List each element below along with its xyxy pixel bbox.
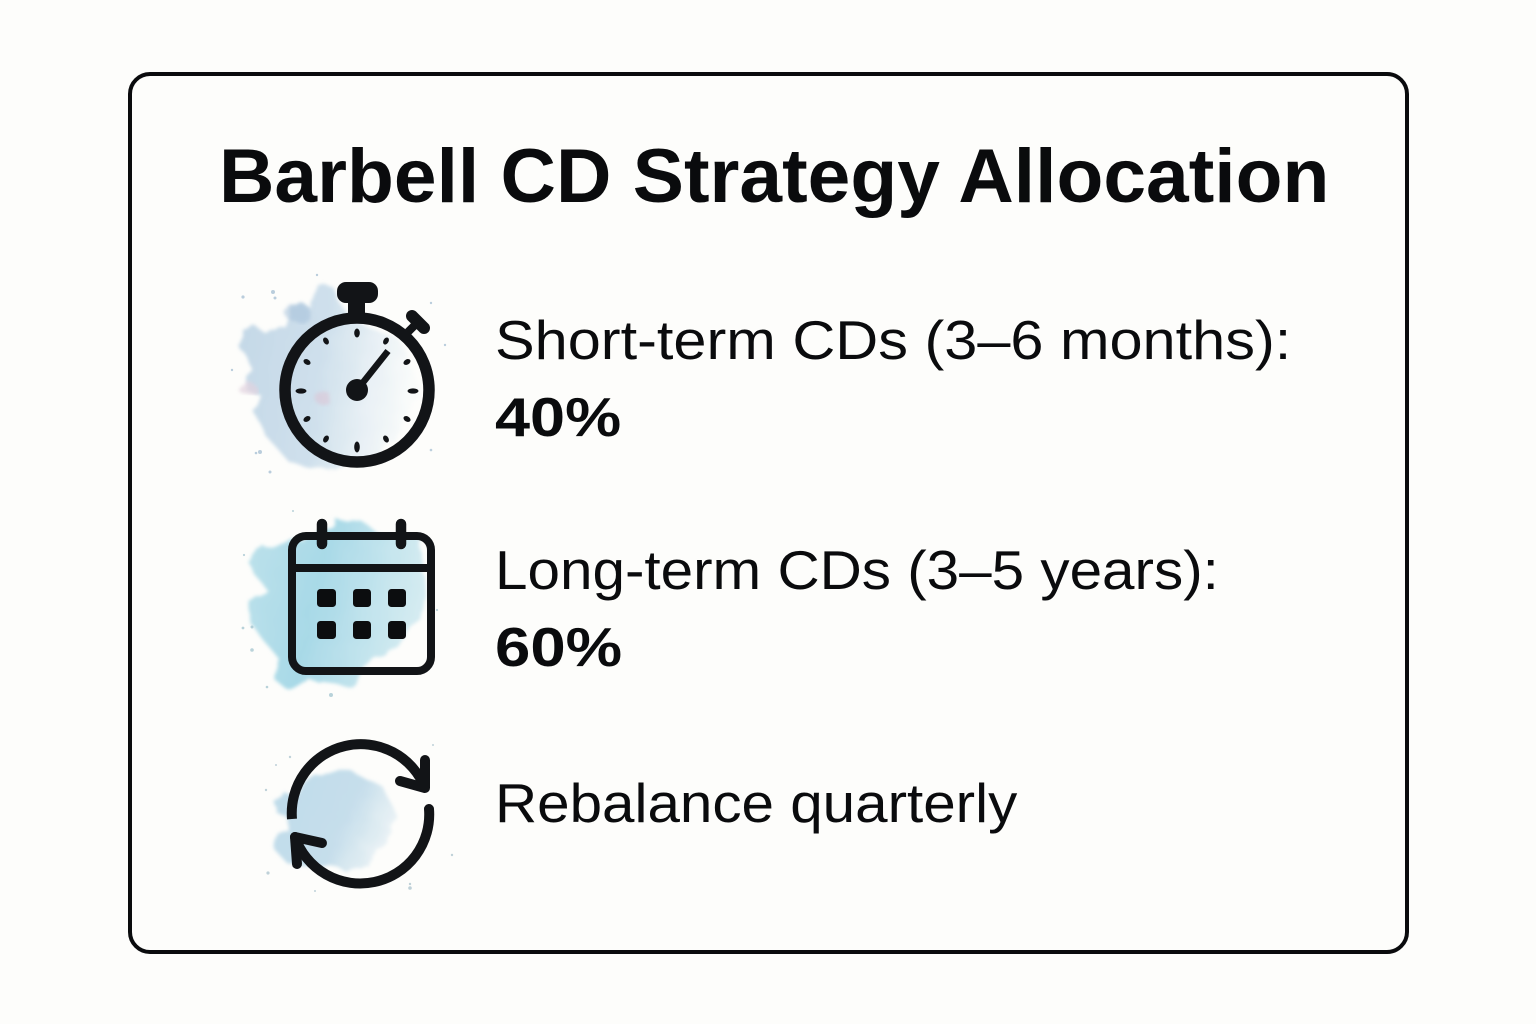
text: short-term label: Short-term CDs (3–6 months):: [495, 309, 1291, 371]
text: 60%: 60%: [495, 616, 622, 678]
icon: stopwatch: [231, 274, 446, 474]
text: long-term label: Long-term CDs (3–5 years):: [495, 539, 1219, 601]
text: 40%: 40%: [495, 386, 621, 448]
text: rebalance: Rebalance quarterly: [495, 772, 1017, 834]
icon: rebalance arrows: [265, 744, 453, 892]
icon: calendar: [242, 510, 438, 697]
title: Barbell CD Strategy Allocation: [219, 134, 1329, 219]
